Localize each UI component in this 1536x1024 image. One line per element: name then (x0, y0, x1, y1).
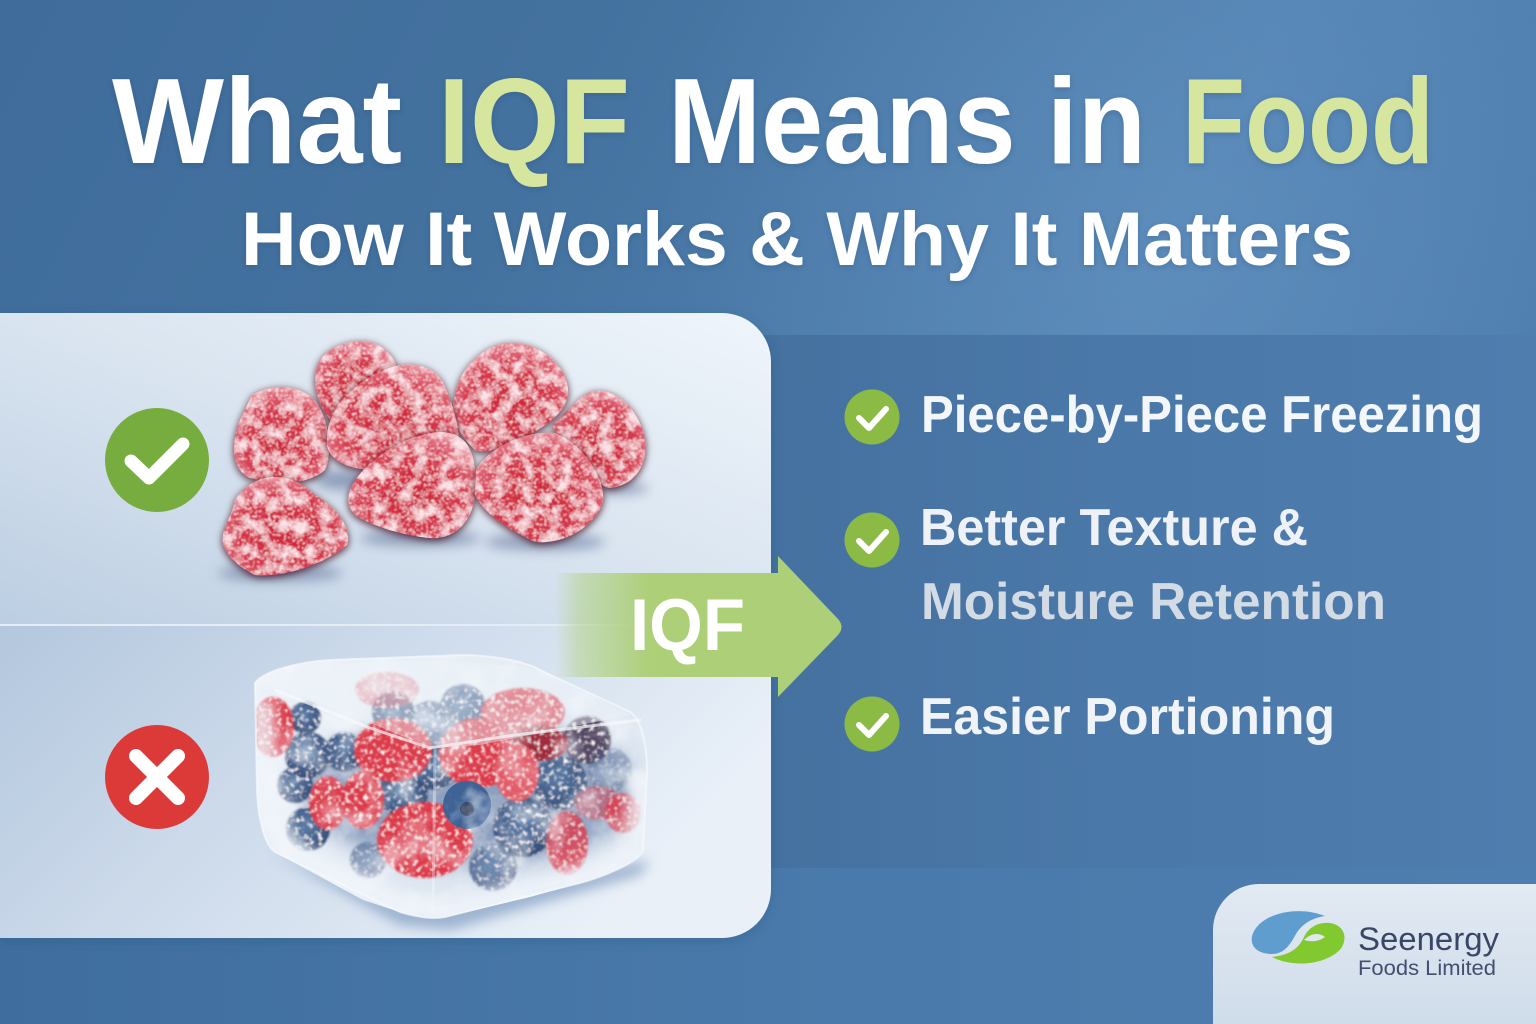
benefit: better texture and moisture retention: Better Texture & (920, 499, 1308, 557)
ice frost overlay (260, 672, 638, 900)
icon: green check (105, 408, 209, 512)
subtitle: How It Works & Why It Matters (241, 197, 1353, 282)
panel: logo (1213, 884, 1536, 1024)
ice rim frost (262, 700, 642, 912)
company name: Seenergy (1358, 921, 1499, 957)
panel: logo: Foods Limited (1358, 956, 1496, 980)
icon: Seenergy logo mark (1252, 911, 1345, 964)
benefits panel band (700, 335, 1536, 868)
panel: block frozen (0, 626, 771, 938)
lower background strip (0, 868, 1536, 1024)
title: What (112, 53, 402, 189)
comparison panel (0, 313, 771, 938)
arrow: IQF (555, 556, 842, 697)
blueberries (277, 684, 632, 891)
title (112, 53, 1434, 189)
berry shadows (218, 470, 648, 581)
icon: red cross (105, 725, 209, 829)
benefit: piece-by-piece freezing: Piece-by-Piece Freezing (921, 386, 1483, 444)
panel: IQF individually frozen (0, 313, 771, 626)
strawberry cluster (223, 341, 645, 575)
benefit: better texture and moisture retention: Moisture Retention (921, 573, 1386, 631)
title: Food (1182, 53, 1434, 189)
benefit: better texture and moisture retention (844, 499, 1386, 631)
ice shadow (270, 852, 650, 930)
title: Means in (668, 53, 1146, 189)
blueberry front (443, 781, 491, 829)
frozen strawberries (218, 341, 648, 581)
title: IQF (438, 53, 630, 189)
ice body (255, 655, 647, 918)
frozen berries (256, 672, 646, 917)
ice top face haze (354, 672, 603, 748)
benefit: easier portioning: Easier Portioning (920, 688, 1335, 746)
arrow label: IQF (630, 585, 745, 666)
raspberries (252, 672, 641, 878)
inner haze (305, 715, 635, 865)
ice edges (255, 655, 647, 918)
ice block with berries (240, 650, 660, 930)
